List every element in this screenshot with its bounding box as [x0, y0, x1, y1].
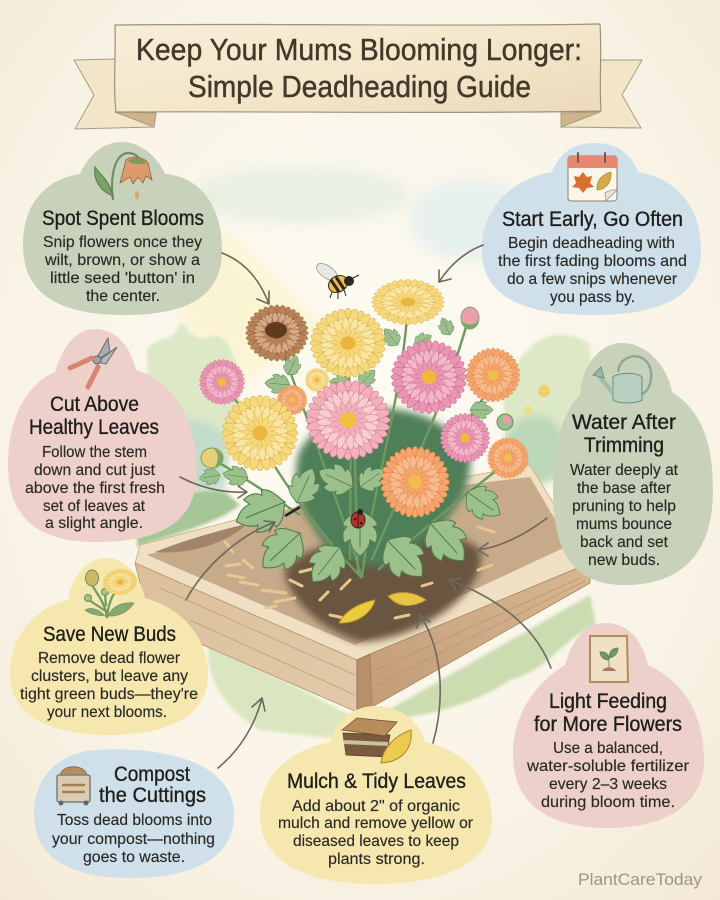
bud top right [461, 307, 479, 329]
panel: light feeding [513, 623, 704, 828]
left fold [115, 112, 156, 127]
panel: water after trimming: Trimming [584, 434, 664, 457]
panel: compost the cuttings: Toss dead blooms into [57, 812, 212, 829]
panel: mulch and tidy leaves [260, 706, 492, 884]
arrow: start early [439, 245, 483, 282]
panel: save new buds: clusters, but leave any [31, 668, 188, 685]
panel: water after trimming: the base after [577, 480, 672, 497]
arrow: save new buds [186, 521, 275, 600]
pink bloom far left [170, 330, 274, 434]
panel: spot spent blooms: wilt, brown, or show a [44, 252, 200, 269]
panel: save new buds [10, 556, 208, 735]
panel: mulch and tidy leaves: Add about 2" of organic [292, 798, 460, 815]
yellow bloom left [197, 370, 323, 496]
panel: light feeding: every 2–3 weeks [549, 776, 667, 793]
panel: compost the cuttings: the Cuttings [99, 784, 206, 807]
panel: save new buds: Save New Buds [43, 623, 176, 646]
arrow: light feeding [449, 578, 551, 668]
icon: pruners [70, 338, 117, 387]
arrow: spot spent blooms [222, 253, 269, 304]
arrow: water after trimming [478, 518, 547, 556]
bud right [497, 414, 513, 430]
arrow: mulch [417, 615, 440, 743]
arrows to plant [180, 245, 551, 768]
icon: mulch layers and leaf [342, 718, 411, 763]
panel: light feeding: water-soluble fertilizer [526, 758, 690, 775]
panel: spot spent blooms: little seed 'button' in [50, 270, 195, 287]
panel: save new buds: your next blooms. [47, 704, 167, 721]
panel: cut above healthy leaves: Follow the stem [42, 444, 147, 461]
panel: start early: Begin deadheading with [508, 235, 675, 252]
orange bloom far right [460, 410, 556, 506]
pink bloom centre [278, 354, 418, 486]
fallen yellow leaf right [388, 593, 426, 606]
panel: cut above healthy leaves: Cut Above [50, 393, 139, 416]
ladybug [351, 509, 365, 528]
fallen yellow leaf left [339, 600, 375, 623]
spent brown bloom [225, 286, 329, 380]
panel: water after trimming: Water deeply at [570, 462, 679, 479]
panel: water after trimming: back and set [580, 534, 669, 551]
panel: compost the cuttings: your compost—nothing [52, 831, 215, 848]
panel: water after trimming: Water After [572, 411, 676, 434]
title: Simple Deadheading Guide [188, 69, 531, 104]
foliage mass [296, 409, 470, 566]
icon: watering can [593, 356, 651, 403]
leaves [250, 519, 313, 581]
panel: cut above healthy leaves: set of leaves at [43, 498, 146, 515]
left ribbon tail [74, 59, 154, 129]
grass below left face [208, 640, 350, 740]
cut mark [285, 507, 300, 516]
watermark: PlantCareToday [578, 870, 703, 889]
panel: cut above healthy leaves [8, 329, 197, 542]
raised garden bed [135, 465, 590, 712]
banner body [115, 24, 601, 112]
panel: spot spent blooms [23, 142, 222, 315]
panel: save new buds: tight green buds—they're [20, 686, 198, 703]
panel: start early: Start Early, Go Often [502, 208, 683, 231]
yellow bloom top [348, 264, 468, 340]
panel: spot spent blooms: the center. [86, 288, 160, 305]
panel: mulch and tidy leaves: plants strong. [328, 851, 425, 868]
panel: light feeding: Light Feeding [549, 690, 667, 713]
icon: compost bin [57, 767, 90, 806]
panel: start early: do a few snips whenever [507, 271, 678, 288]
panel: water after trimming: new buds. [588, 552, 660, 569]
small background blooms [267, 375, 317, 425]
mulch chips [225, 527, 494, 618]
icon: calendar [568, 153, 617, 201]
orange bloom right [448, 330, 538, 420]
panel: cut above healthy leaves: Healthy Leaves [29, 416, 159, 439]
garden watercolor backdrop [130, 150, 596, 740]
yellow bloom middle [285, 286, 411, 400]
panel: mulch and tidy leaves: mulch and remove yellow or [278, 815, 474, 832]
panel: spot spent blooms: Snip flowers once they [43, 234, 202, 251]
icon: fertilizer bag [590, 636, 628, 682]
arrow: cut above [180, 477, 247, 498]
pink bloom right [366, 316, 492, 438]
panel: light feeding: during bloom time. [541, 794, 675, 811]
title: Keep Your Mums Blooming Longer: [136, 32, 582, 67]
title banner [74, 24, 642, 129]
grass below right face [385, 595, 596, 720]
panel: water after trimming [553, 343, 713, 585]
panel: compost the cuttings [34, 749, 234, 878]
panel: spot spent blooms: Spot Spent Blooms [42, 207, 204, 230]
bud left [201, 448, 223, 468]
panel: compost the cuttings: Compost [114, 763, 190, 786]
panel: start early [482, 143, 701, 315]
panel: mulch and tidy leaves: Mulch & Tidy Leaves [287, 770, 466, 793]
panel: compost the cuttings: goes to waste. [83, 849, 185, 866]
orange bloom centre [358, 423, 472, 541]
right ribbon tail [561, 60, 642, 128]
stems [218, 305, 508, 578]
panel: light feeding: for More Flowers [534, 713, 682, 736]
icon: flower sprig with buds [84, 556, 152, 618]
panel: cut above healthy leaves: down and cut just [34, 462, 156, 479]
title [136, 32, 582, 104]
panel: cut above healthy leaves: a slight angle. [45, 515, 143, 532]
pink bloom small right [424, 397, 506, 479]
chrysanthemum plant [170, 264, 556, 623]
right fold [561, 112, 600, 127]
panel: water after trimming: mums bounce [576, 516, 672, 533]
panel: start early: you pass by. [550, 289, 635, 306]
panel: cut above healthy leaves: above the first fresh [25, 480, 165, 497]
arrow: compost [218, 698, 265, 768]
panel: start early: the first fading blooms and [498, 253, 687, 270]
panel: mulch and tidy leaves: diseased leaves to keep [293, 833, 459, 850]
panel: save new buds: Remove dead flower [38, 650, 181, 667]
panel: water after trimming: pruning to help [572, 498, 676, 515]
icon: wilted flower [95, 153, 152, 200]
bee [314, 260, 359, 299]
panel: light feeding: Use a balanced, [553, 740, 663, 757]
